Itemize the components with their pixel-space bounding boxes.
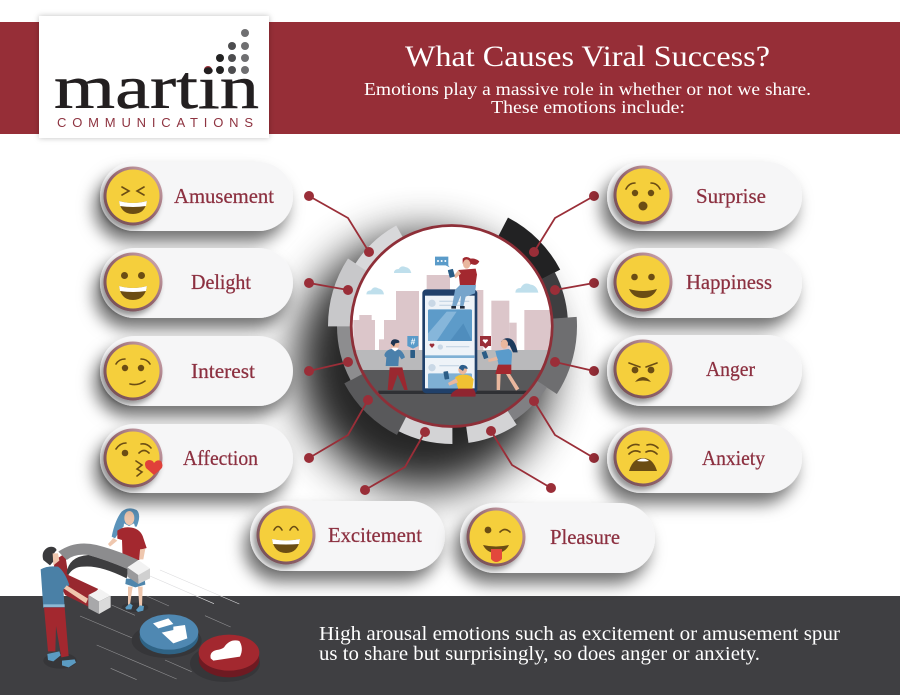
clouds bbox=[366, 266, 538, 294]
bottom text: High arousal emotions such as excitement or amusement spur bbox=[319, 624, 841, 645]
person with heart bbox=[480, 336, 519, 391]
pill: Excitement bbox=[250, 501, 445, 571]
header band bbox=[0, 22, 900, 134]
label: Anxiety bbox=[702, 446, 765, 470]
logo: Martin Communications bbox=[39, 16, 269, 138]
phone bbox=[422, 289, 477, 393]
central hub shadow bbox=[296, 234, 552, 490]
logo tagline: COMMUNICATIONS bbox=[57, 115, 253, 130]
connector: Anger bbox=[550, 357, 599, 376]
central illustration: social media scene bbox=[350, 226, 553, 430]
person with hashtag bbox=[384, 336, 418, 390]
bottom text: us to share but surprisingly, so does anger or anxiety. bbox=[319, 644, 760, 665]
person sitting bbox=[443, 365, 476, 397]
connector: Delight bbox=[304, 278, 353, 295]
icon: slight smile face bbox=[104, 342, 162, 400]
label: Happiness bbox=[686, 270, 772, 294]
connector: Surprise bbox=[529, 191, 599, 257]
woman bbox=[108, 508, 148, 612]
label: Affection bbox=[183, 446, 258, 470]
label: Pleasure bbox=[550, 525, 620, 549]
ground bbox=[350, 350, 553, 370]
icon: smiling face bbox=[614, 252, 672, 312]
label: Delight bbox=[191, 270, 251, 294]
blue thumbs-up badge bbox=[132, 614, 202, 658]
segmented ring bbox=[301, 175, 603, 477]
connector: Anxiety bbox=[529, 396, 599, 463]
connector: Interest bbox=[304, 357, 353, 376]
man bbox=[41, 547, 88, 669]
pill: Happiness bbox=[607, 248, 802, 318]
icon: laughing face bbox=[104, 166, 162, 226]
icon: winking tongue face bbox=[466, 508, 526, 566]
logo wordmark: martin bbox=[54, 55, 259, 122]
pill: Affection bbox=[100, 424, 293, 493]
logo dots bbox=[204, 29, 249, 74]
bottom text bbox=[319, 624, 841, 665]
label: Anger bbox=[706, 357, 755, 381]
red heart badge bbox=[190, 635, 260, 682]
illustration: people with magnet attracting likes bbox=[41, 508, 260, 682]
person with hashtag: # bbox=[411, 337, 416, 347]
magnet bbox=[53, 543, 150, 614]
subtitle: These emotions include: bbox=[491, 97, 685, 117]
label: Surprise bbox=[696, 184, 766, 208]
icon: kissing face bbox=[104, 428, 162, 488]
icon: grinning face bbox=[104, 252, 162, 312]
motion lines bbox=[80, 570, 239, 680]
connector: Excitement bbox=[360, 427, 430, 495]
label: Amusement bbox=[174, 184, 274, 208]
pill: Delight bbox=[100, 248, 293, 318]
subtitle bbox=[364, 79, 811, 117]
pill: Interest bbox=[100, 336, 293, 406]
icon: beaming face bbox=[256, 506, 316, 564]
icon: surprised face bbox=[614, 166, 672, 224]
pill: Anxiety bbox=[607, 424, 802, 493]
bottom band bbox=[0, 596, 900, 695]
connector: Happiness bbox=[550, 278, 599, 295]
pill: Surprise bbox=[607, 162, 802, 231]
connector: Pleasure bbox=[486, 426, 556, 493]
connector: Affection bbox=[304, 395, 373, 463]
label: Interest bbox=[191, 359, 255, 383]
pill: Pleasure bbox=[460, 503, 655, 573]
pill: Anger bbox=[607, 335, 802, 406]
hub outline bbox=[351, 226, 552, 426]
label: Excitement bbox=[328, 523, 422, 547]
pill: Amusement bbox=[100, 162, 293, 231]
icon: anxious face bbox=[614, 428, 672, 486]
person on top of phone bbox=[435, 257, 479, 309]
title: What Causes Viral Success? bbox=[405, 40, 770, 73]
icon: angry face bbox=[614, 340, 672, 398]
subtitle: Emotions play a massive role in whether or not we share. bbox=[364, 79, 811, 99]
connector: Amusement bbox=[304, 191, 374, 257]
buildings bbox=[353, 275, 550, 351]
